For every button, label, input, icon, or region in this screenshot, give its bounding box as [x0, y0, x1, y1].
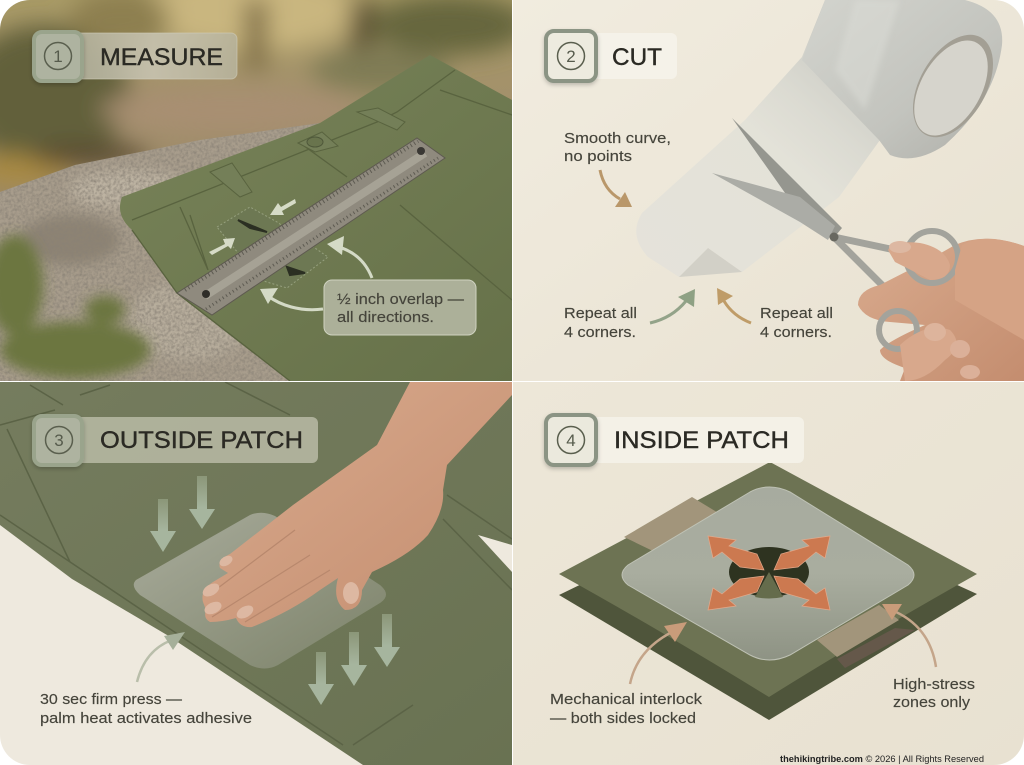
pants [120, 55, 512, 381]
annotation: smooth curve: Smooth curve, [564, 130, 671, 147]
credit: thehikingtribe.com © 2026 | All Rights Reserved [780, 754, 984, 765]
callout: overlap: ½ inch overlap — [337, 291, 464, 308]
annotation: high-stress zones [882, 604, 975, 711]
heading: measure: MEASURE [100, 44, 223, 71]
heading: outside patch: 3 [54, 431, 64, 450]
icon: hand on patch [200, 382, 512, 627]
annotation: repeat right [717, 288, 833, 341]
folded corner [679, 248, 742, 277]
heading: measure: 1 [53, 47, 63, 66]
panel: cut [513, 0, 1024, 381]
annotation: firm press: 30 sec firm press — [40, 691, 182, 708]
arrows: overlap [209, 199, 372, 310]
heading: inside patch: INSIDE PATCH [614, 427, 789, 454]
heading: outside patch: OUTSIDE PATCH [100, 427, 303, 454]
panel: measure [0, 0, 530, 381]
patch: clear tape [134, 513, 386, 668]
arrows: press down [150, 476, 400, 705]
annotation: repeat right: 4 corners. [760, 324, 832, 341]
patch: clear patch [622, 487, 914, 660]
annotation: mechanical interlock: Mechanical interlock [550, 691, 703, 708]
annotation: firm press: palm heat activates adhesive [40, 710, 252, 727]
annotation: repeat left: 4 corners. [564, 324, 636, 341]
annotation: high-stress zones: zones only [893, 694, 971, 711]
heading: inside patch: 4 [566, 431, 576, 450]
arrows: radial [708, 536, 830, 610]
heading: cut [546, 31, 677, 81]
icon: ruler [177, 138, 445, 315]
callout: overlap: all directions. [337, 309, 434, 326]
annotation: mechanical interlock: — both sides locked [550, 710, 696, 727]
annotation: repeat left: Repeat all [564, 305, 637, 322]
icon: hand [858, 231, 1024, 381]
annotation: smooth curve: no points [564, 148, 632, 165]
annotation: mechanical interlock [550, 622, 703, 727]
heading: cut: CUT [612, 44, 662, 71]
callout: overlap [324, 280, 476, 335]
icon: scissors [712, 118, 890, 286]
annotation: firm press [40, 632, 252, 727]
heading: cut: 2 [566, 47, 576, 66]
annotation: high-stress zones: High-stress [893, 676, 975, 693]
annotation: repeat left [564, 289, 695, 341]
heading: outside patch [34, 416, 318, 465]
heading: inside patch [546, 415, 804, 465]
annotation: smooth curve [564, 130, 671, 207]
heading: measure [34, 32, 237, 81]
annotation: repeat right: Repeat all [760, 305, 833, 322]
panel: outside patch [0, 382, 512, 765]
panel: inside patch [513, 382, 1024, 765]
icon: tape roll [636, 0, 1002, 252]
